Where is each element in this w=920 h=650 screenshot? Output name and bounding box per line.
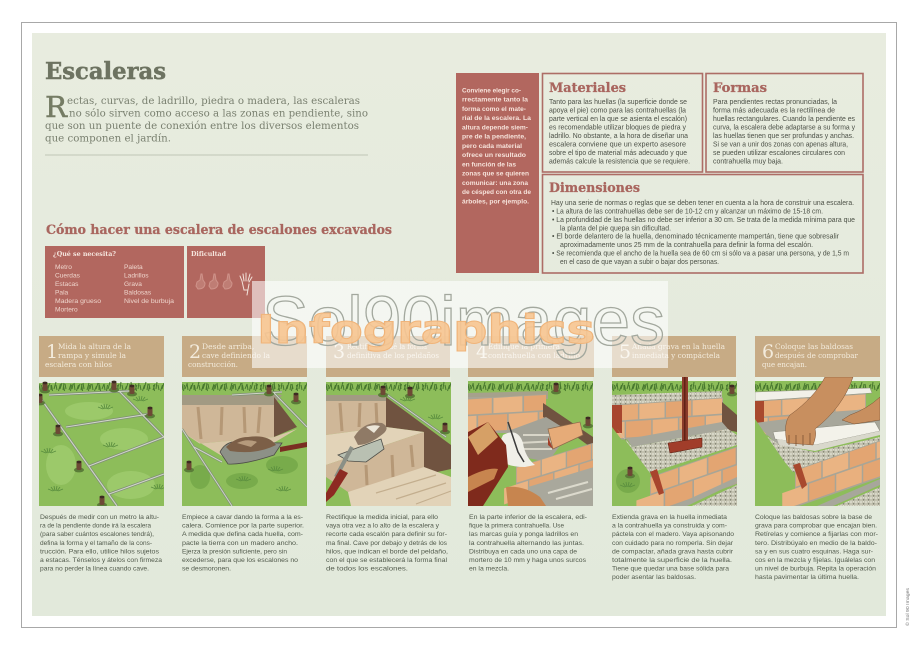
step 5 header <box>612 336 736 377</box>
step 4 header: contrahuella con ladrillo <box>488 351 580 360</box>
step 4 header <box>468 336 594 377</box>
step 2 text: se desmoronen. <box>182 566 231 573</box>
panel: side note: comunicar: una zona <box>462 180 528 187</box>
panel: materiales: sobre el tipo de material más adecuado y que <box>549 150 687 157</box>
panel: materials needed <box>45 246 184 318</box>
step 6 illustration: placing paving slabs <box>755 377 880 506</box>
step 4 text <box>469 514 587 573</box>
step 5 header: 5 <box>619 341 631 363</box>
panel: materials needed: Paleta <box>124 264 143 271</box>
step 1 header: escalera con hilos <box>45 360 112 369</box>
step 2 <box>182 336 307 573</box>
step 3 text: ma final. Cave por debajo y detrás de los <box>326 540 448 547</box>
intro text block: que son un puente de conexión entre los diversos elementos <box>45 120 359 132</box>
step 6 text: un nivel de burbuja. Repita la operación <box>755 566 876 573</box>
panel: side note <box>456 73 539 273</box>
panel: side note: altura depende siem- <box>462 124 528 132</box>
intro text block: ectas, curvas, de ladrillo, piedra o madera, las escaleras <box>67 95 360 107</box>
step 5 <box>612 336 737 580</box>
panel: formas: contrahuella muy baja. <box>713 158 783 166</box>
intro text block: que componen el jardín. <box>45 132 171 144</box>
step 2 text: calera. Comience por la parte superior. <box>182 523 304 530</box>
step 4 illustration: laying bricks <box>468 381 593 506</box>
step 4 header: 4 <box>476 341 488 363</box>
step 6 header: 6 <box>762 341 774 363</box>
intro text block: no sólo sirven como acceso a las zonas en pendiente, sino <box>69 108 368 120</box>
panel: materiales: Tanto para las huellas (la superficie donde se <box>549 99 687 106</box>
panel: formas: Si se van a unir dos zonas con apenas altura, <box>713 142 848 148</box>
panel: side note: pre de la pendiente, <box>462 134 526 141</box>
step 2 text: A medida que defina cada huella, com- <box>182 531 303 538</box>
step 3 illustration: trowel on steps <box>326 377 451 506</box>
step 6 header: Coloque las baldosas <box>775 342 853 351</box>
step 2 illustration: digging first step <box>182 377 307 506</box>
panel: materiales: parte vertical en la que se asienta el escalón) <box>549 116 687 123</box>
panel: materials needed: Metro <box>55 264 72 271</box>
panel: materiales: ladrillo. No obstante, a la hora de diseñar una <box>549 133 688 140</box>
step 3 header: 3 <box>333 341 345 363</box>
step 3 header: definitiva de los peldaños <box>347 351 439 360</box>
panel: side note: ofrece un resultado <box>462 152 526 159</box>
step 2 header: 2 <box>189 341 201 363</box>
step 1 <box>35 336 166 573</box>
panel: dimensiones: en el caso de que vayan a subir o bajar dos personas. <box>560 259 719 266</box>
step 1 header: 1 <box>46 341 58 363</box>
step 2 text: pacte la tierra con un madero ancho. <box>182 540 298 547</box>
step 2 text: Empiece a cavar dando la forma a la es- <box>182 514 303 521</box>
step 1 text: trucción. Para ello, utilice hilos sujetos <box>40 548 160 555</box>
step 5 text: Tiene que quedar una base sólida para <box>612 566 729 573</box>
step 1 header <box>39 336 164 377</box>
step 5 text: con cuidado para no romperla. Sin dejar <box>612 540 734 547</box>
step 1 text: (para saber cuántos escalones tendrá), <box>40 531 154 538</box>
panel: formas: huellas rectangulares. Cuando la pendiente es <box>713 116 856 123</box>
panel: dimensiones: • Se recomienda que el ancho de la huella sea de 60 cm si sólo va a pasar una persona, y de 1,5 m <box>552 251 849 258</box>
panel: materiales: es recomendable utilizar bloques de piedra y <box>549 124 687 132</box>
step 3 text: de todos los escalones. <box>326 566 408 573</box>
panel: materials needed: Estacas <box>55 281 79 288</box>
panel: formas: se pueden utilizar escalones circulares con <box>713 150 845 157</box>
panel: materiales: además calcule la resistencia que se requiere. <box>549 158 690 166</box>
step 1 text <box>40 514 162 573</box>
panel: materials needed: Ladrillos <box>124 272 149 280</box>
step 6 text <box>755 514 878 581</box>
step 6 text: tero. Distribúyalo en medio de la baldo- <box>755 540 877 547</box>
step 1 text: Después de medir con un metro la altu- <box>40 514 159 521</box>
step 6 <box>755 336 880 580</box>
step 5 illustration: tamping gravel <box>612 377 737 506</box>
panel: materials needed: Madera grueso <box>55 298 101 305</box>
step 1 header: Mida la altura de la <box>58 342 131 351</box>
step 2 text: Ejerza la presión suficiente, pero sin <box>182 548 287 555</box>
step 6 header: después de comprobar <box>775 351 858 360</box>
panel: materiales: apoya el pie) como para las contrahuellas (la <box>549 108 686 114</box>
step 2 header: Desde arriba, <box>202 342 254 351</box>
step 4 text: En la parte inferior de la escalera, edi- <box>469 514 587 521</box>
panel: dimensiones: aproximadamente unos 25 mm de la contrahuella para definir la forma del escalón. <box>560 242 813 249</box>
panel: side note: forma como el mate- <box>462 106 526 113</box>
step 5 text: totalmente la superficie de la huella. <box>612 557 732 564</box>
step 6 text: Retírelas y comience a fijarlas con mor- <box>755 531 878 538</box>
step 1 text: ra de la pendiente donde irá la escalera <box>40 523 151 530</box>
step 4 header: Edifique la primera <box>488 342 560 351</box>
panel: side note: en función de las <box>462 162 516 168</box>
step 3 text <box>326 514 448 573</box>
subtitle: Cómo hacer una escalera de escalones excavados <box>46 223 392 238</box>
step 5 text: poder asentar las baldosas. <box>612 574 696 581</box>
panel: materials needed: Baldosas <box>124 290 152 296</box>
panel: materials needed: Cuerdas <box>55 272 81 280</box>
panel: dimensiones: la planta del pie quepa sin dificultad. <box>560 225 671 232</box>
step 6 text: sa y en sus cuatro esquinas. Haga sur- <box>755 548 873 555</box>
panel: dimensiones: Hay una serie de normas o reglas que se deben tener en cuenta a la hora de construir una escalera. <box>551 200 854 207</box>
panel: materials needed: Nivel de burbuja <box>124 298 174 305</box>
panel: side note: de césped con otra de <box>462 189 531 196</box>
watermark: Infographics <box>257 308 595 353</box>
step 5 text: de compactar, añada grava hasta cubrir <box>612 548 734 555</box>
step 3 header <box>326 336 450 377</box>
step 2 header: construcción. <box>188 360 238 369</box>
panel: difficulty <box>187 246 265 318</box>
step 3 header: Rectifique y dé la forma <box>347 342 427 351</box>
panel: formas: Para pendientes rectas pronunciadas, la <box>713 99 837 106</box>
panel: difficulty: Dificultad <box>191 251 227 258</box>
step 4 text: fique la primera contrahuella. Use <box>469 523 564 530</box>
step 3 text: vaya otra vez a lo alto de la escalera y <box>326 523 440 530</box>
step 5 text: páctela con el madero. Vaya apisonando <box>612 531 734 538</box>
panel: materiales: escalera conviene que un experto asesore <box>549 142 686 148</box>
step 6 header <box>755 336 880 377</box>
panel: formas: Formas <box>713 81 767 96</box>
panel: side note: rial de la escalera. La <box>462 115 531 122</box>
panel: dimensiones: • La profundidad de las huellas no debe ser inferior a 30 cm. Se trata de la medida mínima para que <box>552 217 855 224</box>
panel: formas: curva, la escalera debe adaptarse a su forma y <box>713 124 856 132</box>
step 3 <box>326 336 451 573</box>
panel: side note: rrectamente tanto la <box>462 97 528 104</box>
panel: side note: zonas que se quieren <box>462 171 529 178</box>
step 4 text: Distribuya en cada uno una capa de <box>469 548 577 555</box>
panel: materials needed: Pala <box>55 290 69 296</box>
panel: formas: forma más adecuada es la rectilínea de <box>713 108 835 114</box>
step 4 <box>468 336 594 570</box>
step 2 text <box>182 514 304 573</box>
step 3 text: recorte cada escalón para definir su for- <box>326 531 447 538</box>
panel: side note: pero cada material <box>462 143 522 150</box>
step 6 text: hasta pavimentar la última huella. <box>755 574 859 581</box>
step 4 text: mortero de 10 mm y haga unos surcos <box>469 557 587 564</box>
panel: dimensiones: Dimensiones <box>549 181 640 196</box>
icon: difficulty hands <box>196 273 252 295</box>
step 2 header <box>182 336 307 377</box>
step 6 text: Coloque las baldosas sobre la base de <box>755 514 872 521</box>
drop cap: R <box>45 90 68 124</box>
step 4 text: en la mezcla. <box>469 566 509 573</box>
step 5 header: Añada grava en la huella <box>631 342 725 351</box>
panel: dimensiones <box>542 174 863 273</box>
step 6 header: que encajan. <box>762 360 807 369</box>
step 1 text: para no perder la línea cuando cave. <box>40 566 149 573</box>
panel: dimensiones: • El borde delantero de la huella, denominado técnicamente mampertán, tiene que sobresalir <box>552 234 840 241</box>
step 2 header: cave definiendo la <box>202 351 270 360</box>
step 1 header: rampa y simule la <box>58 351 126 360</box>
step 3 text: Rectifique la medida inicial, para ello <box>326 514 438 521</box>
step 4 text: la contrahuella alternando las juntas. <box>469 540 584 547</box>
intro text block <box>45 90 368 144</box>
panel: materials needed: Mortero <box>55 306 78 314</box>
panel: side note: árboles, por ejemplo. <box>462 198 529 206</box>
panel: materiales <box>542 74 702 172</box>
step 2 text: excederse, para que los escalones no <box>182 557 298 564</box>
panel: formas: las huellas tienen que ser profundas y anchas. <box>713 133 854 140</box>
panel: dimensiones: • La altura de las contrahuellas debe ser de 10-12 cm y alcanzar un máximo de 15-18 cm. <box>552 208 823 215</box>
step 1 text: a estacas. Ténselos y átelos con firmeza <box>40 557 162 564</box>
step 5 text: a la contrahuella ya construida y com- <box>612 523 727 530</box>
step 3 text: con el que se establecerá la forma final <box>326 557 448 564</box>
step 6 text: grava para comprobar que encajan bien. <box>755 523 877 530</box>
copyright credit: © Sol 90 Images <box>904 587 911 626</box>
panel: formas <box>706 74 863 172</box>
panel: materials needed: ¿Qué se necesita? <box>53 251 116 258</box>
title: Escaleras <box>45 58 166 85</box>
panel: materials needed: Grava <box>124 281 142 288</box>
step 6 text: cos en la mezcla y fíjelas. Iguálelas con <box>755 557 875 564</box>
step 5 header: inmediata y compáctela <box>632 351 720 360</box>
step 3 text: hilos, que indican el borde del peldaño, <box>326 548 448 555</box>
step 5 text <box>612 514 734 581</box>
step 1 text: defina la forma y el tamaño de la cons- <box>40 540 152 547</box>
step 1 illustration: strings over grass <box>35 377 166 507</box>
step 5 text: Extienda grava en la huella inmediata <box>612 514 727 521</box>
watermark: Sol90images <box>262 282 665 360</box>
panel: side note: Conviene elegir co- <box>462 88 521 94</box>
panel: materiales: Materiales <box>549 81 626 96</box>
step 4 text: las marcas guía y ponga ladrillos en <box>469 531 578 538</box>
